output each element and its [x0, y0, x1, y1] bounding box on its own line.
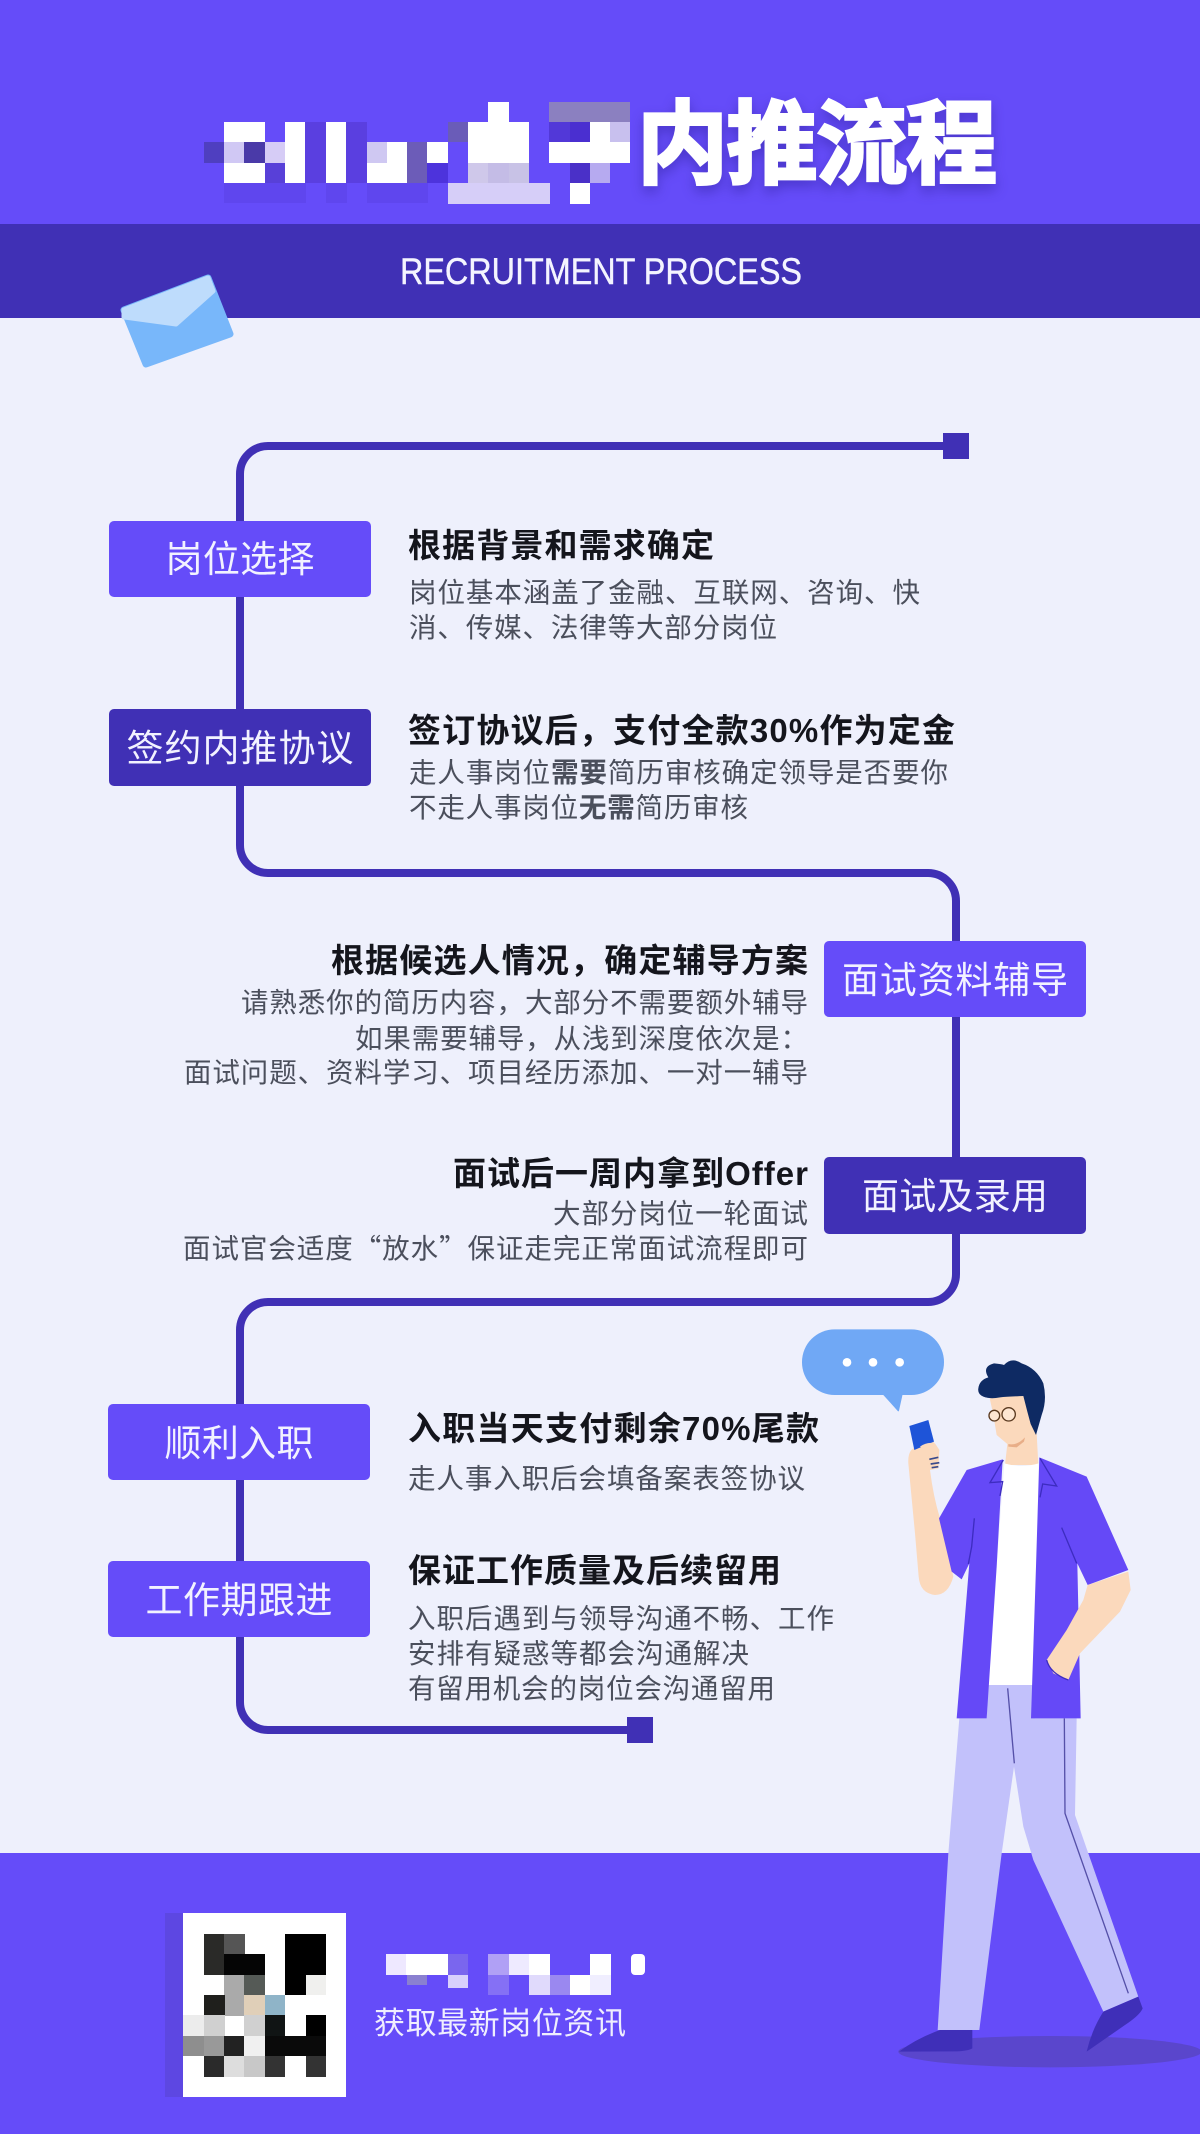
description: 岗位选择: 根据背景和需求确定	[408, 527, 714, 564]
description: 岗位选择: 消、传媒、法律等大部分岗位	[409, 612, 777, 643]
description: 顺利入职: 入职当天支付剩余70%尾款	[408, 1410, 819, 1447]
description: 面试及录用: 面试官会适度“放水”保证走完正常面试流程即可	[183, 1226, 808, 1266]
label: 岗位选择	[109, 521, 371, 597]
description: 面试及录用: 大部分岗位一轮面试	[553, 1198, 808, 1229]
trousers	[938, 1683, 1138, 2030]
description: 面试资料辅导: 请熟悉你的简历内容，大部分不需要额外辅导	[241, 987, 808, 1018]
description: 面试资料辅导: 面试问题、资料学习、项目经历添加、一对一辅导	[184, 1057, 808, 1088]
label: 签约内推协议	[109, 709, 371, 786]
neck and face	[989, 1395, 1040, 1465]
right arm in pocket	[1047, 1572, 1131, 1680]
obscured account name	[386, 1954, 645, 1995]
description: 工作期跟进: 安排有疑惑等都会沟通解决	[408, 1638, 749, 1669]
ground shadow	[898, 2036, 1200, 2067]
label: 岗位选择: 岗位选择	[166, 539, 314, 580]
illustration: man with phone	[898, 1360, 1200, 2067]
icon: envelope	[124, 278, 230, 364]
description: 工作期跟进	[408, 1552, 834, 1704]
label: 面试资料辅导	[824, 941, 1086, 1017]
description: 工作期跟进: 有留用机会的岗位会沟通留用	[408, 1673, 775, 1704]
subtitle band	[0, 224, 1200, 318]
description: 顺利入职: 走人事入职后会填备案表签协议	[408, 1463, 805, 1494]
title: mosaic-obscured company name	[204, 102, 630, 204]
description: 工作期跟进: 入职后遇到与领导沟通不畅、工作	[408, 1603, 834, 1634]
flow line	[240, 433, 969, 1743]
step 6: work follow-up	[108, 1552, 834, 1704]
description: 顺利入职	[408, 1410, 819, 1494]
description: 岗位选择: 岗位基本涵盖了金融、互联网、咨询、快	[409, 577, 920, 608]
chat bubble	[802, 1329, 944, 1411]
label: 顺利入职: 顺利入职	[164, 1423, 314, 1464]
shoes	[899, 1997, 1143, 2052]
t-shirt	[988, 1463, 1039, 1685]
title text: 内推流程	[637, 95, 997, 196]
step 5: onboarding	[108, 1404, 819, 1494]
description: 签约内推协议: 签订协议后，支付全款30%作为定金	[408, 712, 955, 749]
step 3: interview coaching	[184, 941, 1086, 1088]
footer panel	[0, 1853, 1200, 2134]
subtitle band: RECRUITMENT PROCESS	[400, 251, 802, 292]
description: 面试资料辅导: 如果需要辅导，从浅到深度依次是：	[355, 1023, 808, 1054]
label: 签约内推协议: 签约内推协议	[126, 728, 354, 769]
description: 签约内推协议: 不走人事岗位无需简历审核	[409, 792, 748, 823]
label: 工作期跟进	[108, 1561, 370, 1637]
hair	[978, 1360, 1045, 1435]
footer caption: 获取最新岗位资讯	[374, 2006, 626, 2041]
step 2: sign agreement	[109, 709, 955, 823]
description: 面试及录用	[183, 1155, 808, 1266]
description: 面试资料辅导	[184, 942, 808, 1088]
glasses	[989, 1408, 1015, 1421]
description: 签约内推协议: 走人事岗位需要简历审核确定领导是否要你	[409, 757, 948, 788]
description: 面试及录用: 面试后一周内拿到Offer	[453, 1155, 808, 1192]
left arm and hand	[908, 1442, 953, 1595]
description: 岗位选择	[408, 527, 920, 643]
label: 工作期跟进: 工作期跟进	[146, 1580, 332, 1621]
header panel	[0, 0, 1200, 224]
jacket	[939, 1457, 1128, 1718]
step 4: interview and offer	[183, 1155, 1086, 1266]
description: 工作期跟进: 保证工作质量及后续留用	[408, 1552, 781, 1589]
label: 面试资料辅导: 面试资料辅导	[842, 960, 1068, 1001]
step 1: position selection	[109, 521, 920, 643]
description: 签约内推协议	[408, 712, 955, 823]
description: 面试资料辅导: 根据候选人情况，确定辅导方案	[331, 942, 808, 979]
phone	[909, 1420, 939, 1468]
label: 面试及录用: 面试及录用	[862, 1176, 1048, 1217]
label: 顺利入职	[108, 1404, 370, 1480]
label: 面试及录用	[824, 1157, 1086, 1234]
QR code (obscured)	[183, 1913, 346, 2097]
